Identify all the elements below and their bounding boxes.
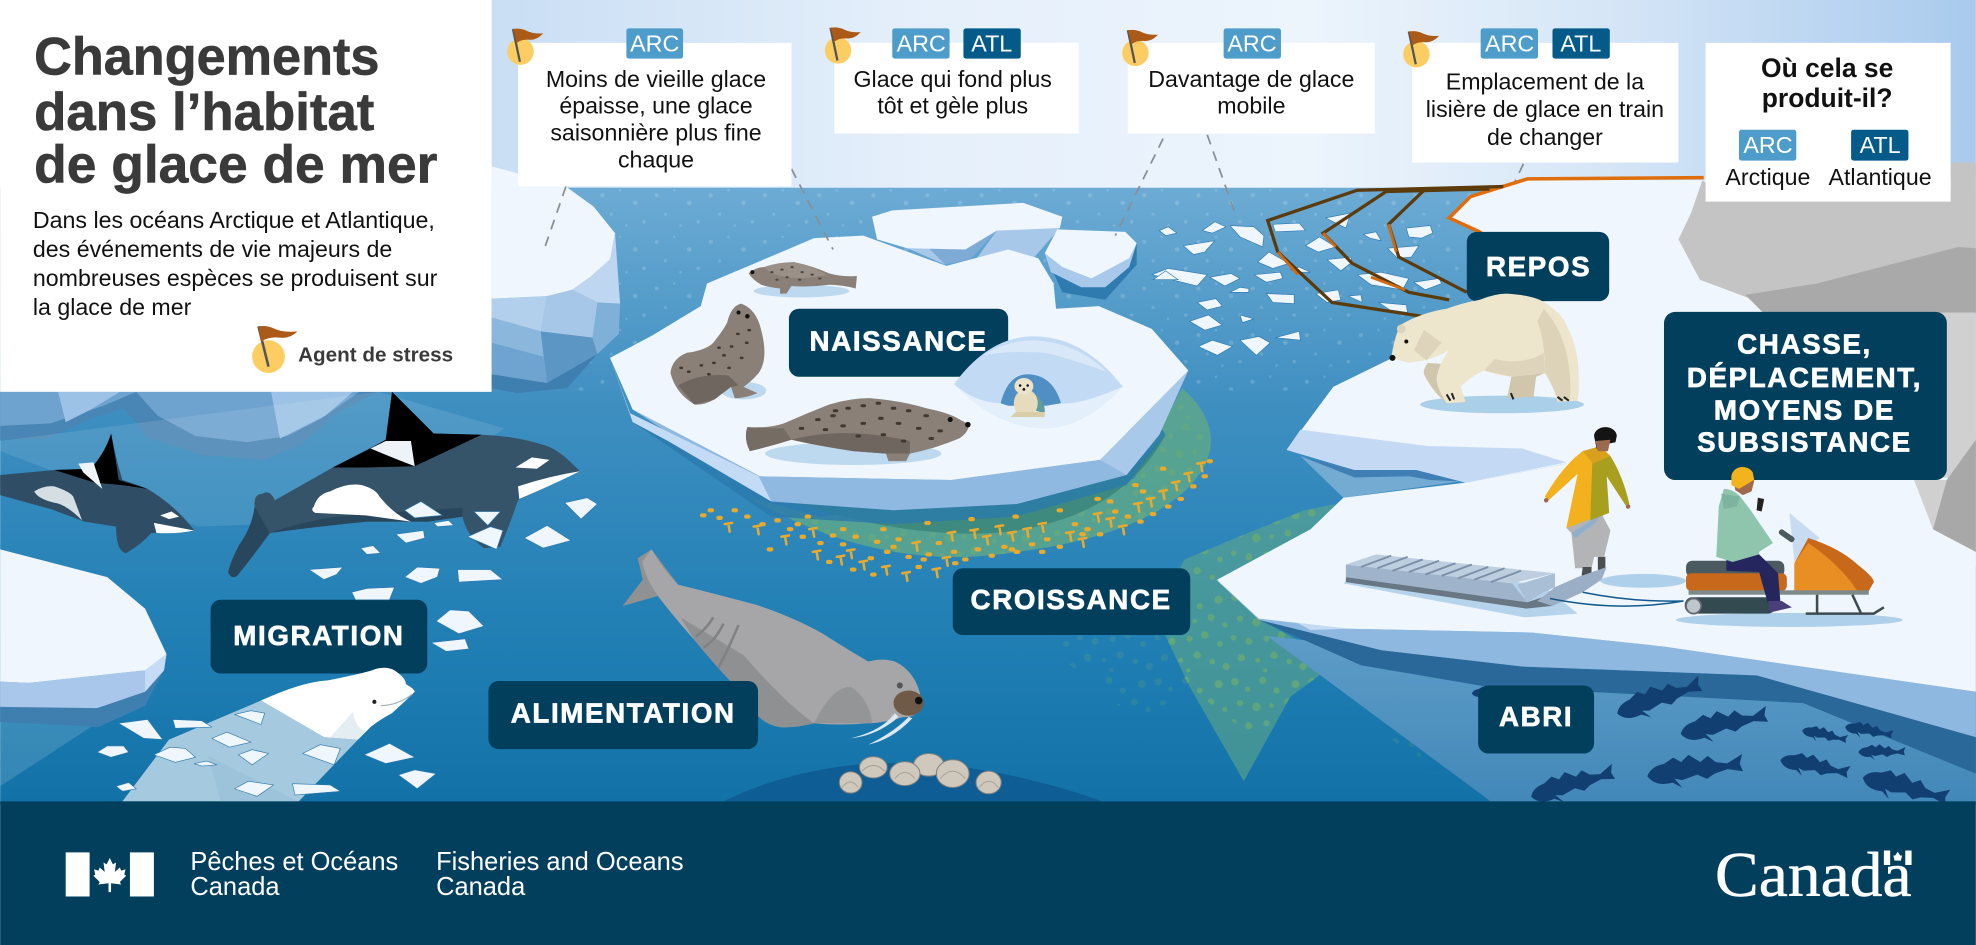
callout: melts earlier: Glace qui fond plus	[854, 66, 1052, 92]
badge: ATL: ATL	[1860, 132, 1901, 158]
legend: where it happens: produit-il?	[1762, 83, 1893, 113]
label: NAISSANCE	[789, 309, 1008, 377]
callout: old ice	[507, 28, 791, 186]
badge: ARC: ARC	[630, 31, 679, 57]
icon: seal pup	[1011, 378, 1045, 417]
legend: where it happens: Atlantique	[1829, 164, 1932, 190]
badge: ATL	[1851, 130, 1908, 161]
ice edge lines: orange and brown	[1268, 178, 1704, 316]
label: CHASSE, DÉPLACEMENT, MOYENS DE SUBSISTANCE: CHASSE,	[1737, 328, 1872, 359]
label: REPOS	[1467, 232, 1609, 301]
polar bear	[1389, 294, 1584, 413]
callout: ice edge: Emplacement de la	[1446, 68, 1644, 94]
fish school	[1472, 674, 1951, 816]
legend: stress flag: Agent de stress	[298, 344, 453, 367]
badge: ARC: ARC	[1227, 31, 1277, 57]
badge: ARC: ARC	[1485, 31, 1534, 57]
igloo with seal pup	[954, 336, 1123, 428]
large orca	[228, 392, 580, 577]
callout: mobile ice: mobile	[1217, 92, 1285, 118]
person in yellow parka	[1544, 427, 1630, 582]
intro text: Dans les océans Arctique et Atlantique,	[33, 207, 435, 233]
callout: mobile ice	[1122, 28, 1375, 134]
seal: top	[749, 262, 857, 297]
intro text	[33, 207, 438, 320]
label: MIGRATION	[211, 600, 427, 673]
callout: ice edge	[1403, 28, 1678, 163]
walrus	[623, 549, 924, 745]
title	[34, 27, 437, 195]
badge: ATL	[1552, 28, 1610, 59]
intro text: des événements de vie majeurs de	[33, 236, 392, 262]
callout: mobile ice: Davantage de glace	[1148, 66, 1354, 92]
label: CHASSE, DÉPLACEMENT, MOYENS DE SUBSISTANCE: SUBSISTANCE	[1697, 427, 1912, 458]
label: REPOS: REPOS	[1486, 251, 1591, 282]
legend: stress flag	[252, 326, 453, 373]
label: CHASSE, DÉPLACEMENT, MOYENS DE SUBSISTANCE: DÉPLACEMENT,	[1687, 362, 1922, 393]
callout: old ice: épaisse, une glace	[559, 92, 753, 118]
badge: ATL: ATL	[1560, 31, 1601, 57]
label: CHASSE, DÉPLACEMENT, MOYENS DE SUBSISTANCE	[1664, 312, 1947, 480]
main floe	[610, 236, 1188, 524]
small floe: right	[1045, 229, 1137, 300]
text: department name French: Pêches et Océans	[190, 848, 398, 876]
label: ABRI	[1478, 685, 1594, 753]
sled	[1343, 554, 1684, 617]
background: sea	[0, 188, 1976, 805]
callout: ice edge: lisière de glace en train	[1426, 96, 1664, 122]
underwater ice under the title panel	[0, 392, 504, 786]
background: sky	[492, 0, 1976, 190]
label: MIGRATION: MIGRATION	[233, 620, 405, 651]
callout: old ice: chaque	[618, 147, 694, 173]
algae patch under main floe	[750, 388, 1211, 557]
seal: sitting	[670, 304, 766, 405]
iceberg: lower left	[0, 549, 166, 727]
label: ABRI: ABRI	[1499, 701, 1573, 732]
label: ALIMENTATION	[488, 681, 758, 749]
label: CROISSANCE: CROISSANCE	[971, 584, 1172, 615]
copepods scatter	[702, 461, 1211, 581]
right upper ice shelf	[1287, 180, 1976, 567]
dashed pointer lines	[543, 135, 1524, 252]
green algae beam	[1046, 504, 1449, 788]
badge: ATL	[963, 28, 1021, 59]
title: de glace de mer	[34, 136, 437, 195]
badge: ARC: ARC	[897, 31, 946, 57]
ice pieces: right cluster	[1152, 213, 1442, 355]
badge: ARC: ARC	[1743, 132, 1793, 158]
label: ALIMENTATION: ALIMENTATION	[511, 698, 736, 729]
snowmobile with rider	[1600, 467, 1903, 627]
seal: large lying	[746, 398, 971, 465]
callout: ice edge: de changer	[1487, 124, 1603, 150]
stress flag	[825, 27, 861, 64]
stress flag	[1403, 31, 1439, 67]
callout: old ice: saisonnière plus fine	[550, 119, 762, 145]
text: department name English: Fisheries and Oceans	[436, 848, 684, 876]
stress flag	[1122, 30, 1158, 66]
label: CHASSE, DÉPLACEMENT, MOYENS DE SUBSISTANCE: MOYENS DE	[1714, 395, 1895, 426]
callout: old ice: Moins de vieille glace	[546, 66, 766, 92]
footer bar: Canada	[436, 873, 526, 901]
callout: melts earlier	[825, 27, 1079, 134]
intro text: nombreuses espèces se produisent sur	[33, 265, 438, 291]
title: dans l’habitat	[34, 83, 374, 142]
rock	[1678, 163, 1976, 552]
legend: where it happens	[1706, 43, 1951, 202]
icon: Canadian flag	[66, 852, 154, 896]
callout: melts earlier: tôt et gèle plus	[877, 92, 1028, 118]
clams	[839, 753, 1001, 794]
footer bar	[0, 801, 1976, 945]
small orca	[0, 433, 194, 553]
badge: ATL: ATL	[971, 31, 1012, 57]
legend: where it happens: Arctique	[1725, 164, 1810, 190]
label: NAISSANCE: NAISSANCE	[810, 325, 988, 356]
small floe: back	[872, 203, 1062, 265]
title: Changements	[34, 27, 379, 86]
iceberg: upper left	[492, 166, 620, 393]
intro text: la glace de mer	[33, 294, 192, 320]
Canada wordmark: Canada	[1715, 840, 1912, 910]
seabed mound	[723, 763, 1103, 801]
label: CROISSANCE	[953, 568, 1190, 635]
right lower ice shelf	[1216, 440, 1976, 801]
legend: where it happens: Où cela se	[1761, 53, 1893, 83]
footer bar: Canada	[190, 873, 280, 901]
beluga	[122, 668, 415, 801]
ice pieces: left cluster	[97, 498, 597, 796]
stress flag	[507, 29, 543, 65]
title panel	[0, 0, 492, 392]
